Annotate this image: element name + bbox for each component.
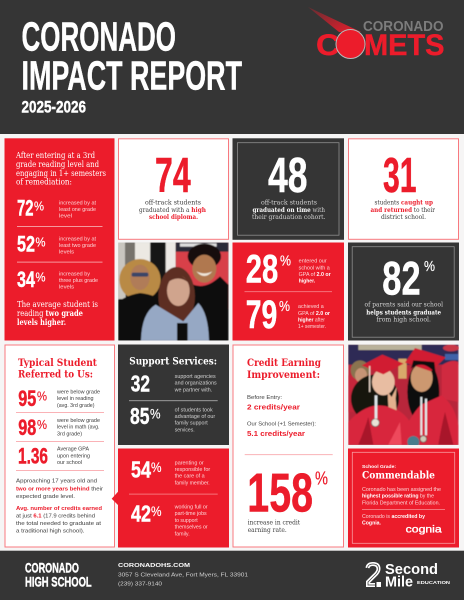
logo: Cognia: cognia <box>406 525 442 536</box>
text block: age and grade: expected grade level. <box>16 494 75 500</box>
school year: 2025-2026 <box>22 99 86 117</box>
stat: 72%: least one grade <box>59 207 96 213</box>
panel heading: engaging in 1+ semesters <box>16 169 106 178</box>
text block: age and grade: two or more years behind their <box>16 486 103 492</box>
caption: district school. <box>381 214 426 221</box>
stat: 28%: GPA of 2.0 or <box>299 272 331 278</box>
stat: 1.36 GPA: our school <box>57 460 82 466</box>
panel: credit earning improvement <box>233 345 344 547</box>
panel: typical student <box>5 345 114 547</box>
stat: 32 <box>131 371 217 397</box>
stat: 52%: increased by at <box>59 237 97 243</box>
big number 31: 31 <box>383 149 416 203</box>
stat: 42%: % <box>151 504 162 519</box>
stat: 28%: 28 <box>246 248 278 292</box>
stat: 34%: 34 <box>17 267 36 292</box>
stat: 42%: working full or <box>175 505 208 511</box>
grade description: highest possible rating by the <box>362 494 434 500</box>
our school rate <box>247 422 316 438</box>
stat: 1.36 GPA <box>18 443 90 468</box>
stat: 54%: 54 <box>131 457 151 483</box>
big number 158%: 158 <box>247 462 313 524</box>
stat: 72%: level <box>59 214 72 220</box>
caption <box>364 302 443 323</box>
big number 158%: % <box>315 468 328 488</box>
stat: 34%: levels <box>59 285 74 291</box>
stat: 79%: % <box>279 298 290 315</box>
contact details <box>118 563 248 587</box>
accreditation: Cognia. <box>362 521 382 527</box>
stat: 85%: advantage of our <box>175 414 215 420</box>
stat: 95%: were below grade <box>57 389 100 395</box>
grade description <box>362 487 441 506</box>
contact details: CORONADOHS.COM <box>118 563 190 569</box>
stat: 98%: % <box>37 417 47 432</box>
stat: 52% <box>17 232 97 257</box>
contact details: (239) 337-9140 <box>118 581 162 587</box>
stat: 28%: school with a <box>299 265 330 271</box>
grade value: Commendable <box>362 471 435 482</box>
panel: 82% parents <box>348 242 459 340</box>
caption: off-track students <box>145 200 201 207</box>
big number 48: 48 <box>268 149 308 203</box>
panel heading <box>15 151 106 187</box>
big number 82%: 82 <box>382 251 421 304</box>
summary text: levels higher. <box>17 317 66 327</box>
logo: Coronado Comets: C <box>316 29 340 62</box>
before entry rate <box>247 395 300 411</box>
panel: reading growth <box>4 138 114 340</box>
panel heading <box>18 357 97 381</box>
stat: 32: support agencies <box>175 374 216 380</box>
stat: 34%: three plus grade <box>59 278 98 284</box>
big number 82%: % <box>424 258 435 275</box>
caption: graduated on time with <box>252 207 325 214</box>
stat: 52%: 52 <box>17 232 35 257</box>
stat: 32: and organizations <box>175 381 217 387</box>
stat: 54%: parenting or <box>175 460 204 466</box>
panel heading: of remediation: <box>16 178 72 187</box>
logo: Coronado Comets: CORONADO <box>363 19 444 35</box>
stat: 54%: responsible for <box>175 467 210 473</box>
logo: Second Mile Education: Mile <box>385 575 413 591</box>
text block: credits: a traditional high school). <box>16 529 85 535</box>
contact details: 3057 S Cleveland Ave, Fort Myers, FL 33901 <box>118 572 248 578</box>
stat: 42%: themselves or <box>175 525 208 531</box>
stat: 28%: % <box>280 252 291 270</box>
big number 74: 74 <box>155 149 191 203</box>
summary text <box>17 300 98 327</box>
stat: 72%: % <box>34 198 44 214</box>
accreditation: Coronado is accredited by <box>362 514 425 520</box>
text block: credits: Avg. number of credits earned <box>16 506 102 512</box>
logo: Coronado Comets <box>308 7 444 62</box>
stat: 95%: 95 <box>18 386 36 411</box>
stat: 52%: % <box>36 234 46 250</box>
caption: of parents said our school <box>364 302 443 309</box>
our school rate: 5.1 credits/year <box>247 429 305 438</box>
stat: 79%: higher after <box>298 318 325 324</box>
stat: 28%: entered our <box>299 259 327 265</box>
summary text: reading two grade <box>17 308 83 318</box>
caption <box>248 519 301 534</box>
header band <box>0 0 464 134</box>
school name <box>25 560 92 589</box>
school name: CORONADO <box>25 560 79 576</box>
text block: credits: the total needed to graduate at <box>16 521 101 527</box>
photo: graduates <box>348 345 459 448</box>
stat: 79%: GPA of 2.0 or <box>298 311 330 317</box>
stat: 34%: % <box>36 270 46 284</box>
panel heading: Support Services: <box>129 355 217 367</box>
stat: 79%: achieved a <box>298 304 324 310</box>
stat: 32: 32 <box>131 371 150 397</box>
stat: 54% <box>131 457 210 486</box>
stat: 54%: family member. <box>175 480 210 486</box>
title: IMPACT REPORT <box>22 53 242 99</box>
caption: helps students graduate <box>366 309 441 316</box>
stat: 1.36 GPA: 1.36 <box>18 443 48 468</box>
panel: 74 graduated <box>118 139 228 239</box>
stat: 79% <box>246 293 330 337</box>
caption <box>370 200 436 221</box>
stat: 98%: level in math (avg. <box>57 425 100 431</box>
summary text: The average student is <box>17 300 98 309</box>
panel heading: After entering at a 3rd <box>15 151 95 160</box>
text block: credits: at just 6.1 (17.9 credits behind <box>16 513 95 519</box>
stat: 85%: % <box>150 406 160 422</box>
text block: age and grade <box>16 479 103 500</box>
stat: 42% <box>131 501 208 537</box>
stat: 85%: family support <box>175 421 208 427</box>
stat: 98%: 3rd grade) <box>57 431 82 437</box>
stat: 34% <box>17 267 98 292</box>
school name: HIGH SCHOOL <box>25 573 92 589</box>
stat: 1.36 GPA: upon entering <box>57 453 90 459</box>
stat: 54%: the care of a <box>175 474 205 480</box>
stat: 72%: increased by at <box>59 200 97 206</box>
stat: 52%: levels <box>59 250 74 256</box>
panel heading: Credit Earning <box>247 357 322 369</box>
before entry rate: 2 credits/year <box>247 402 300 411</box>
title <box>22 14 242 99</box>
stat: 42%: part-time jobs <box>175 511 207 517</box>
before entry rate: Before Entry: <box>247 395 282 401</box>
caption: and returned to their <box>370 207 436 214</box>
panel heading: grade reading level and <box>16 160 99 169</box>
text block: credits <box>16 506 102 535</box>
stat: 28%: higher. <box>299 278 316 284</box>
accreditation <box>362 514 425 527</box>
caption: students caught up <box>374 200 434 207</box>
stat: 98%: were below grade <box>57 418 100 424</box>
panel: support services <box>118 344 229 445</box>
caption <box>139 200 206 221</box>
logo: Second Mile Education: EDUCATION <box>417 580 451 585</box>
text block: age and grade: Approaching 17 years old and <box>16 479 97 485</box>
panel: school grade <box>348 448 459 548</box>
stat: 52%: least two grade <box>59 243 96 249</box>
caption: from high school. <box>376 316 431 323</box>
stat: 72% <box>17 196 97 221</box>
panel heading: Referred to Us: <box>18 369 93 381</box>
stat: 85%: 85 <box>130 403 150 429</box>
stat: 95%: (avg. 3rd grade) <box>57 403 95 409</box>
caption: off-track students <box>261 200 317 207</box>
stat: 85%: of students took <box>175 407 213 413</box>
panel: 31 returned <box>348 139 458 239</box>
stat: 28% <box>246 248 331 292</box>
stat: 72%: 72 <box>17 196 34 221</box>
stat: 42%: to support <box>175 518 198 524</box>
panel heading: Typical Student <box>18 357 97 369</box>
grade description: Florida Department of Education. <box>362 500 440 506</box>
photo: three students <box>118 242 228 341</box>
caption: graduated with a high <box>139 207 206 214</box>
stat: 79%: 1+ semester. <box>298 324 326 330</box>
grade description: Coronado has been assigned the <box>362 487 441 493</box>
stat: 95%: level in reading <box>57 396 94 402</box>
stat: 42%: 42 <box>131 501 151 527</box>
stat: 95%: % <box>37 388 47 404</box>
stat: 85%: services. <box>175 427 195 433</box>
stat: 98%: 98 <box>18 415 36 440</box>
panel heading: Improvement: <box>247 369 320 381</box>
stat: 34%: increased by <box>59 272 90 278</box>
caption <box>252 200 326 221</box>
grade label: School Grade: <box>362 464 396 469</box>
panel heading <box>247 357 322 381</box>
logo: Second Mile Education: Second <box>385 562 438 578</box>
stat: 42%: family. <box>175 531 190 537</box>
stat: 98% <box>18 415 100 440</box>
panel: 48 on time <box>232 138 344 240</box>
caption: school diploma. <box>149 214 198 221</box>
stat: 85% <box>130 403 215 433</box>
stat: 95% <box>18 386 100 411</box>
footer band <box>0 551 464 600</box>
stat: 79%: 79 <box>246 293 277 337</box>
panel: family responsibilities <box>112 448 229 548</box>
title: CORONADO <box>22 14 176 60</box>
stat: 1.36 GPA: Average GPA <box>57 447 90 453</box>
logo: Coronado Comets: METS <box>364 29 444 62</box>
caption: their graduation cohort. <box>252 214 326 221</box>
stat: 54%: % <box>151 460 162 475</box>
panel: GPA stats <box>232 242 344 340</box>
caption: increase in credit <box>248 519 301 526</box>
our school rate: Our School (+1 Semester): <box>247 422 316 428</box>
logo: Second Mile Education <box>368 562 451 591</box>
caption: earning rate. <box>248 527 287 534</box>
stat: 32: we partner with. <box>175 387 212 393</box>
